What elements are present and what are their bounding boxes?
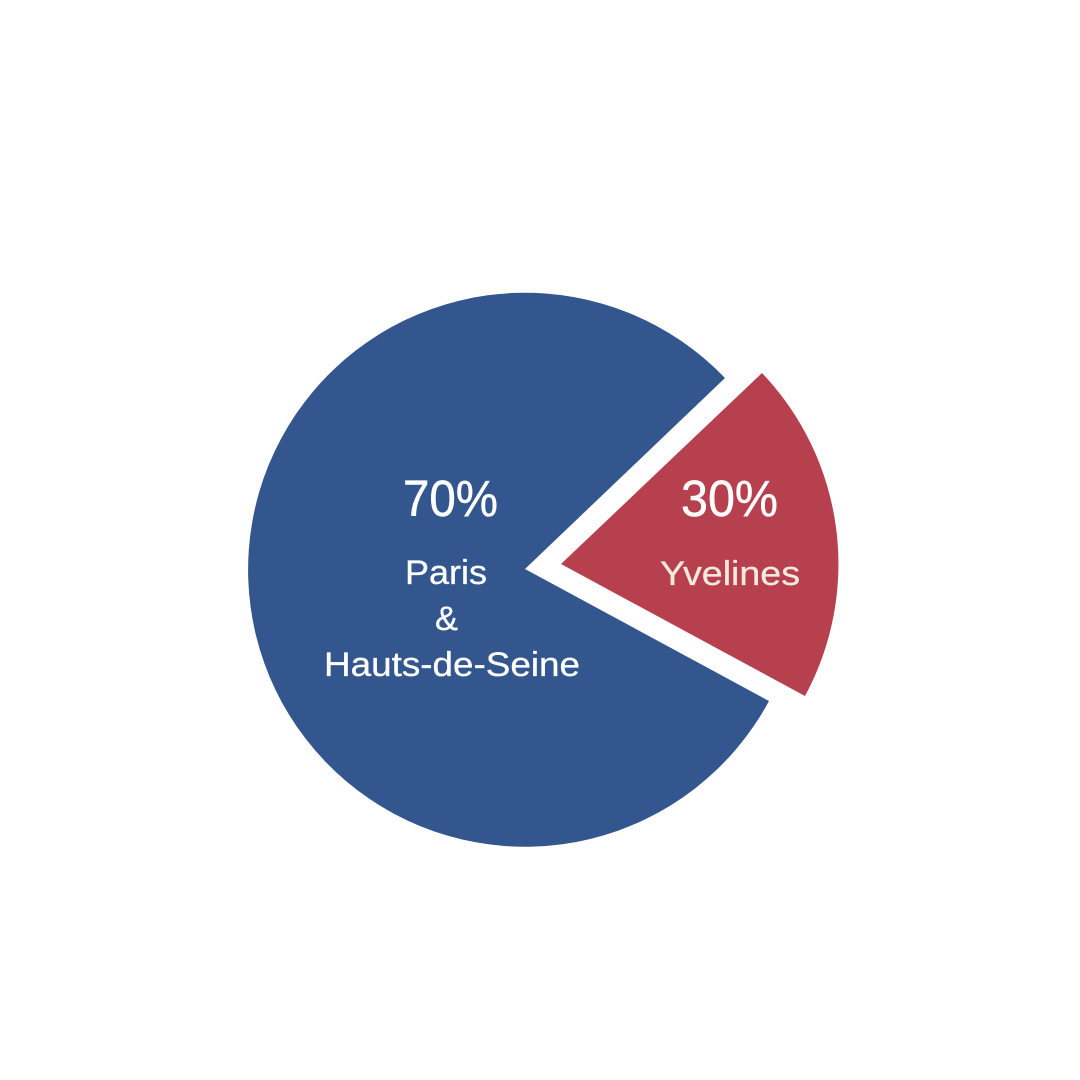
label: ampersand: & [435, 600, 458, 638]
label: 30%: 30% [681, 470, 778, 527]
label: Paris: Paris [405, 554, 487, 592]
label: Yvelines: Yvelines [660, 555, 800, 593]
slice: Yvelines 30% [561, 373, 838, 696]
slice: Paris and Hauts-de-Seine 70% [248, 293, 769, 847]
label: Hauts-de-Seine: Hauts-de-Seine [324, 646, 580, 684]
label: 70%: 70% [403, 470, 498, 527]
